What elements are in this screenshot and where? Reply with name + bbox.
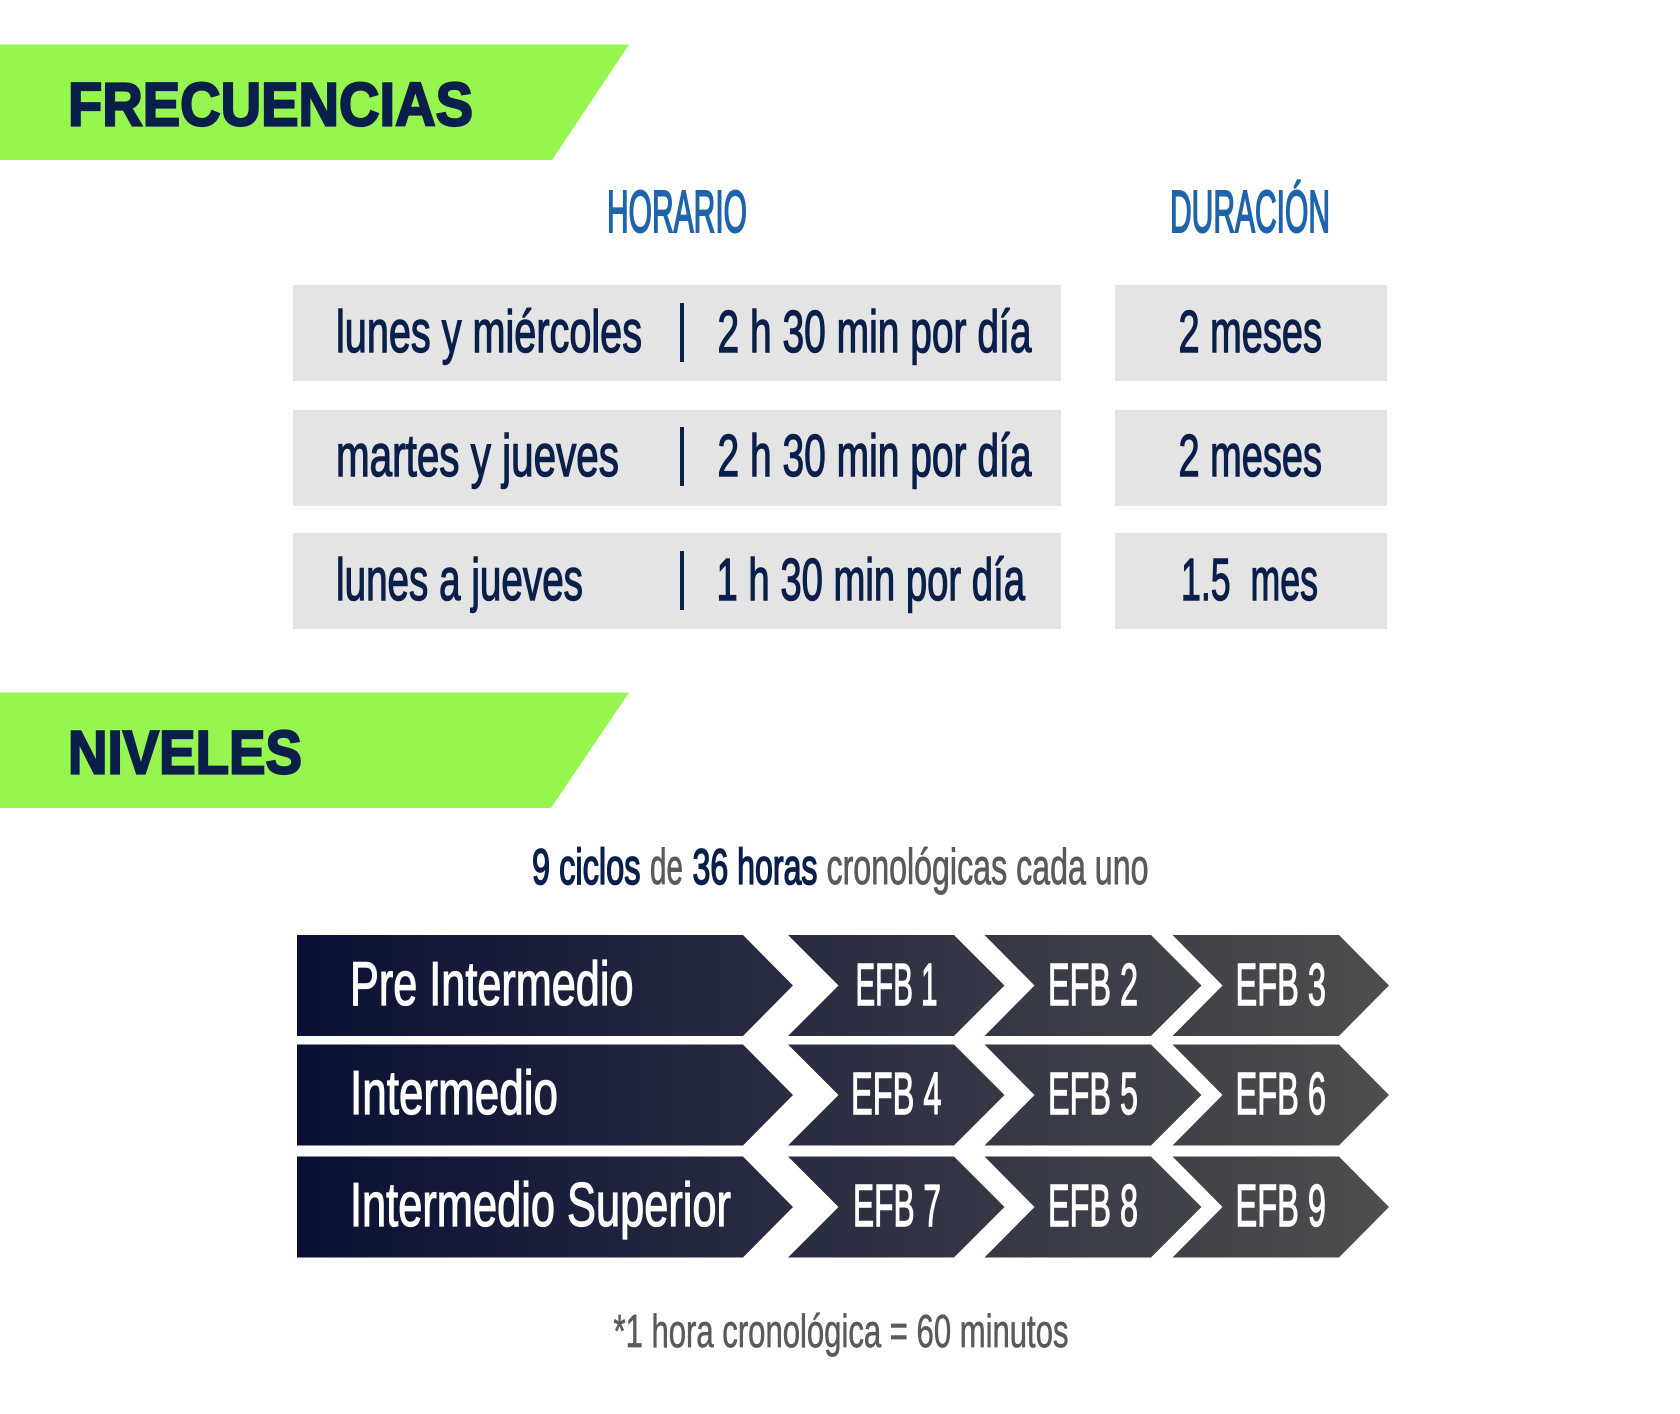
schedule row 3: lunes a jueves — [336, 547, 583, 613]
section banner: frecuencias: FRECUENCIAS — [68, 70, 473, 138]
level row: intermedio — [297, 1044, 1389, 1146]
schedule row 2: 2 h 30 min por día — [718, 423, 1032, 489]
chevron: EFB 4: EFB 4 — [851, 1061, 942, 1127]
subtitle: ciclos y horas: 36 horas — [692, 839, 818, 895]
duration row 2: 2 meses — [1178, 423, 1322, 489]
section banner: niveles — [0, 692, 629, 808]
level row: pre intermedio — [297, 935, 1389, 1036]
footnote: *1 hora cronológica = 60 minutos — [614, 1305, 1068, 1357]
chevron: EFB 2 — [984, 935, 1202, 1036]
chevron: EFB 6 — [1172, 1044, 1389, 1146]
subtitle: ciclos y horas: cronológicas cada uno — [826, 839, 1148, 895]
chevron: EFB 8: EFB 8 — [1048, 1173, 1138, 1239]
schedule row 1: 2 h 30 min por día — [718, 299, 1032, 365]
section banner: frecuencias — [0, 44, 629, 160]
level row: intermedio superior: Intermedio Superior — [350, 1171, 731, 1240]
section banner: niveles: NIVELES — [68, 718, 302, 786]
level row: intermedio superior — [297, 1156, 1389, 1258]
chevron: EFB 7: EFB 7 — [853, 1173, 941, 1239]
schedule row 1: lunes y miércoles — [336, 299, 642, 365]
schedule row 2 — [293, 410, 1061, 506]
level row: pre intermedio: Pre Intermedio — [350, 950, 634, 1019]
subtitle: ciclos y horas: 9 ciclos — [532, 839, 640, 895]
duration row 3: 1.5 mes — [1181, 547, 1318, 613]
chevron: EFB 3 — [1172, 935, 1389, 1036]
schedule row 2: martes y jueves — [336, 423, 619, 489]
schedule row 3: 1 h 30 min por día — [716, 547, 1025, 613]
column heading: horario: HORARIO — [607, 179, 747, 245]
chevron: EFB 9: EFB 9 — [1236, 1173, 1326, 1239]
duration row 1 — [1115, 285, 1387, 381]
chevron: EFB 4 — [788, 1044, 1004, 1146]
column heading: duración: DURACIÓN — [1170, 179, 1330, 245]
duration row 1: 2 meses — [1178, 299, 1322, 365]
subtitle: ciclos y horas — [532, 839, 1148, 895]
schedule row 1 — [293, 285, 1061, 381]
chevron: EFB 2: EFB 2 — [1048, 952, 1138, 1018]
duration row 3 — [1115, 533, 1387, 629]
chevron: EFB 8 — [984, 1156, 1202, 1258]
chevron: EFB 5 — [984, 1044, 1202, 1146]
chevron: EFB 1: EFB 1 — [856, 952, 938, 1018]
duration row 2 — [1115, 410, 1387, 506]
schedule row 3 — [293, 533, 1061, 629]
chevron: EFB 1 — [788, 935, 1004, 1036]
level row: intermedio: Intermedio — [350, 1059, 558, 1128]
subtitle: ciclos y horas: de — [650, 839, 683, 895]
chevron: EFB 7 — [788, 1156, 1004, 1258]
chevron: EFB 9 — [1172, 1156, 1389, 1258]
chevron: EFB 6: EFB 6 — [1236, 1061, 1326, 1127]
chevron: EFB 5: EFB 5 — [1048, 1061, 1138, 1127]
chevron: EFB 3: EFB 3 — [1236, 952, 1326, 1018]
